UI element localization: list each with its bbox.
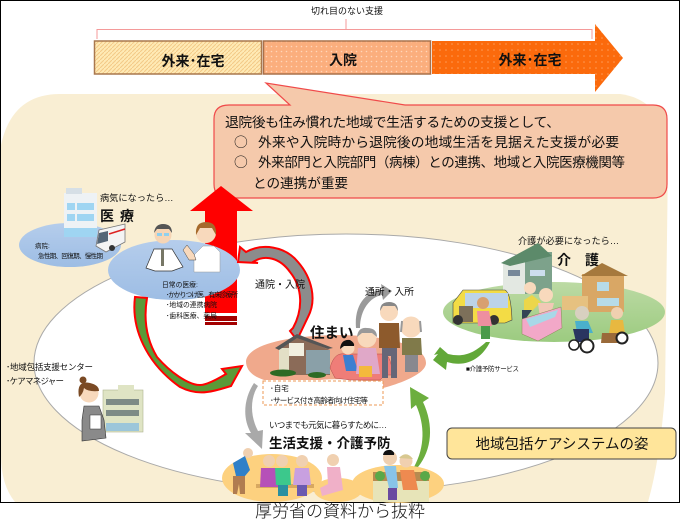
icon: apartment — [501, 243, 552, 294]
care ellipse — [443, 282, 665, 342]
home section — [246, 302, 426, 405]
timeline: seamless support — [94, 5, 623, 92]
clinic text: 日常の医療: — [162, 280, 198, 289]
home list box: ･サービス付き高齢者向け住宅等 — [270, 395, 368, 405]
care heading: 介護が必要になったら… — [518, 235, 619, 246]
care manager section — [6, 362, 143, 441]
medical section — [19, 188, 240, 320]
icon: sofa — [330, 354, 392, 380]
icon: grandmother — [356, 328, 380, 377]
icon: nurse — [183, 222, 220, 272]
timeline bar: outpatient and home: 外来･在宅 — [162, 53, 224, 69]
callout: support needed after discharge: ○ — [234, 131, 248, 151]
icon: doctor — [146, 224, 183, 271]
icon: seniors on bench — [233, 448, 343, 496]
white ellipse: community — [34, 234, 658, 492]
care section — [443, 235, 665, 352]
arrow: home to prevention (gray) — [245, 383, 263, 449]
hospital heading: 病気になったら… — [100, 192, 174, 203]
timeline arrow: outpatient and home — [432, 24, 623, 92]
care manager text: ･地域包括支援センター — [6, 362, 93, 372]
timeline bar: hospitalisation: 入院 — [329, 52, 357, 68]
arrow: care to home (green) — [433, 342, 519, 373]
medical section: 医 療 — [100, 208, 134, 224]
right yellow ellipse — [352, 465, 444, 503]
hospital ellipse — [19, 223, 121, 267]
icon: care manager — [78, 376, 106, 441]
label: visit and admission: 通院・入院 — [255, 279, 305, 291]
arrow: home to day services (gray) — [356, 284, 414, 328]
care manager section: ･ケアマネジャー — [6, 376, 64, 386]
icon: helper with elder — [373, 450, 430, 502]
callout: support needed after discharge — [214, 83, 667, 198]
clinic text — [162, 280, 238, 320]
icon: bath with caregiver — [522, 282, 562, 341]
icon: wheelchair users — [569, 306, 628, 352]
home heading: 住まい — [310, 324, 354, 342]
label: day services and admission: 通所・入所 — [365, 285, 414, 298]
clinic text: ･歯科医療、薬局 — [166, 311, 217, 320]
clinic text: ･かかりつけ医、有床診療所 — [166, 290, 238, 299]
callout: support needed after discharge: 外来や入院時から退院後の地域生活を見据えた支援が必要 — [258, 135, 619, 150]
lifestyle support section — [222, 420, 444, 503]
timeline bar: outpatient and home — [94, 41, 262, 74]
label: community-based integrated care system — [447, 428, 676, 459]
icon: van — [453, 290, 512, 325]
label: community-based integrated care system: 地域包括ケアシステムの姿 — [476, 436, 648, 453]
home ellipse — [246, 335, 426, 388]
timeline bar: hospitalisation — [264, 41, 430, 74]
icon: child — [340, 340, 358, 371]
hospital text — [35, 241, 104, 260]
clinic text: ･地域の連携病院 — [166, 300, 217, 309]
clinic ellipse — [108, 240, 240, 300]
arrow: home to medical (gray, red outline) — [238, 247, 313, 340]
icon: helper — [477, 297, 492, 339]
beige background panel — [1, 94, 668, 502]
source caption: 厚労省の資料から抜粋 — [255, 502, 425, 521]
big red arrow — [190, 186, 253, 325]
lifestyle support section: 生活支援・介護予防 — [269, 435, 390, 451]
label: preventive care services: ■介護予防サービス — [466, 364, 519, 373]
home list box: ･自宅 — [270, 383, 289, 393]
icon: hospital — [64, 188, 97, 237]
callout: support needed after discharge: ○ — [234, 151, 248, 171]
hospital text: 急性期、回復期、慢性期 — [38, 251, 104, 260]
hospital text: 病院: — [35, 241, 50, 250]
care section: 介 護 — [557, 252, 599, 268]
left yellow ellipse — [222, 454, 322, 502]
home list box — [263, 381, 383, 405]
icon: yellow house — [562, 263, 628, 312]
icon: house — [270, 334, 333, 378]
callout: support needed after discharge: 外来部門と入院部門（病棟）との連携、地域と入院医療機関等 — [258, 154, 625, 170]
icon: elder with cane — [400, 316, 422, 372]
timeline arrow: outpatient and home: 外来･在宅 — [498, 52, 562, 68]
callout: support needed after discharge: との連携が重要 — [253, 176, 348, 191]
lifestyle heading: いつまでも元気に暮らすために… — [269, 420, 387, 430]
arrow: prevention to home (green) — [410, 387, 430, 467]
arrow: medical to home (green, red outline) — [134, 297, 242, 392]
icon: grandfather — [379, 302, 400, 378]
callout: support needed after discharge: 退院後も住み慣れた地域で生活するための支援として、 — [225, 114, 560, 130]
icon: ambulance — [96, 224, 125, 252]
icon: building — [103, 385, 143, 432]
timeline heading: 切れ目のない支援 — [311, 5, 383, 16]
